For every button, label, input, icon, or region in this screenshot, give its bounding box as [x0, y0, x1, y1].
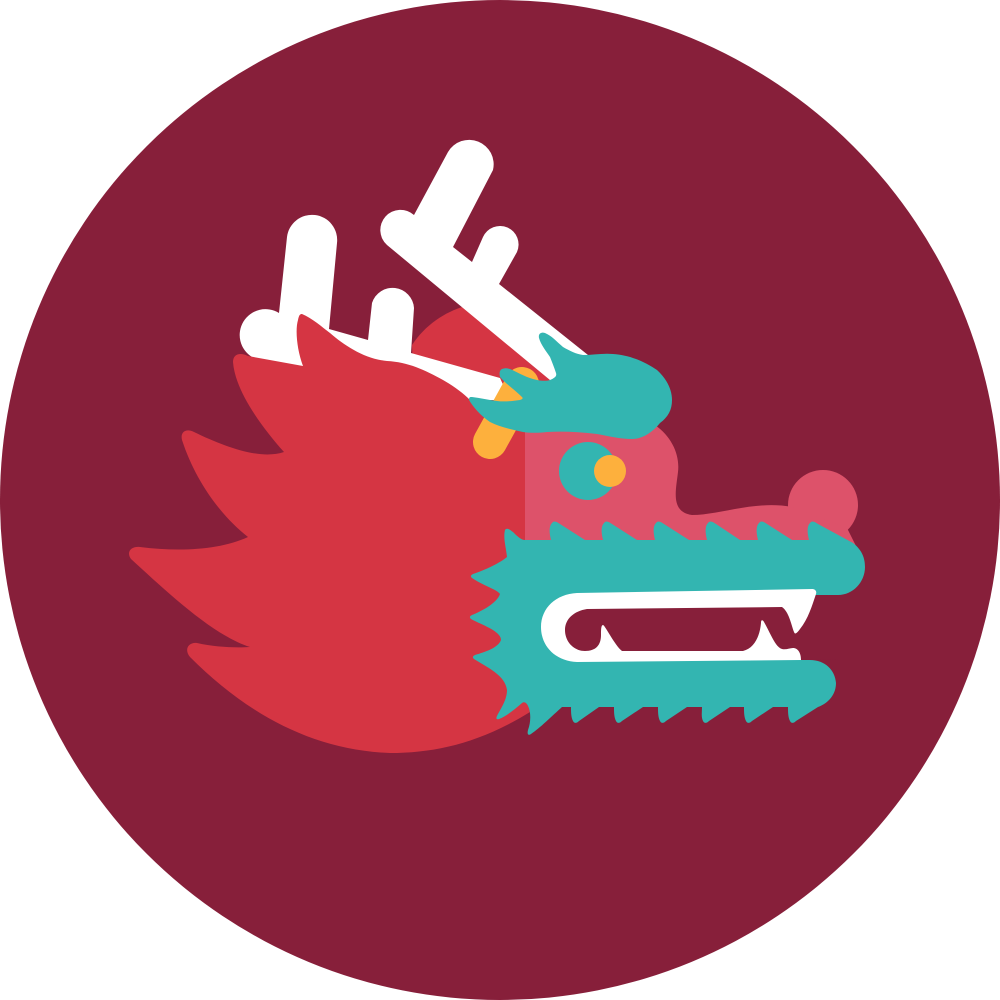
icon: jaws	[470, 521, 865, 735]
icon: ear horn	[490, 384, 522, 442]
icon: pupil	[594, 455, 626, 487]
icon: mane	[129, 314, 530, 753]
icon: brow	[469, 333, 672, 439]
icon: antlers	[240, 140, 588, 400]
icon: back of head dome	[412, 306, 560, 540]
mouth cavity	[560, 595, 840, 660]
icon: face	[525, 425, 856, 560]
icon: mouth and fangs	[541, 589, 816, 662]
icon: nose ball	[788, 470, 858, 540]
icon: eye	[559, 442, 617, 500]
